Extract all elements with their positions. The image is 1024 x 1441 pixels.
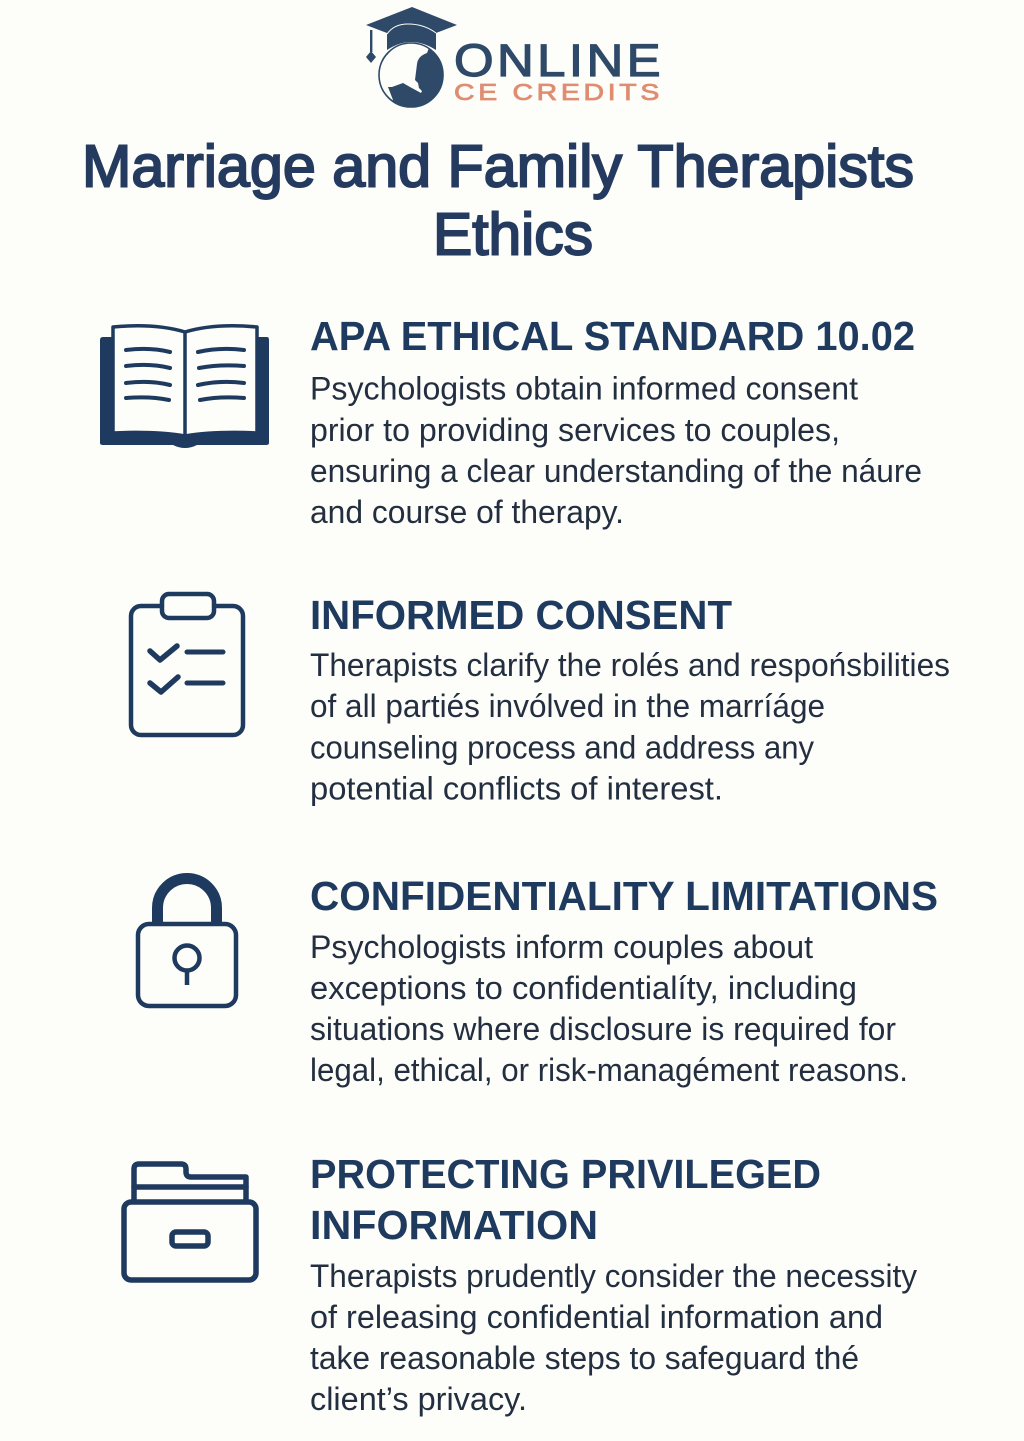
icon: padlock <box>138 878 236 1006</box>
panel: APA ethical standard <box>100 313 922 530</box>
title: Marriage and Family Therapists <box>82 134 914 200</box>
body text <box>310 929 908 1088</box>
body text: ensuring a clear understanding of the náure <box>310 453 922 489</box>
heading <box>310 1151 821 1248</box>
panel: informed consent <box>131 592 950 806</box>
panel: protecting privileged information <box>124 1151 917 1417</box>
body text: prior to providing services to couples, <box>310 412 840 448</box>
heading: INFORMATION <box>310 1202 598 1248</box>
heading: CONFIDENTIALITY LIMITATIONS <box>310 873 938 919</box>
body text <box>310 370 922 530</box>
logo wordmark: ONLINE: ONLINE <box>454 35 664 86</box>
icon: clipboard checklist <box>131 594 243 735</box>
heading: INFORMED CONSENT <box>310 592 732 638</box>
body text <box>310 647 950 806</box>
body text: exceptions to confidentialíty, including <box>310 970 857 1006</box>
icon: file drawer <box>124 1164 256 1280</box>
body text: and course of therapy. <box>310 494 624 530</box>
body text: take reasonable steps to safeguard thé <box>310 1340 859 1376</box>
panel: confidentiality limitations <box>138 873 938 1088</box>
body text: client’s privacy. <box>310 1381 527 1417</box>
body text: of all partiés invólved in the marríáge <box>310 688 825 724</box>
body text: Therapists clarify the rolés and respońsbilities <box>310 647 950 683</box>
icon: graduation cap and profile <box>366 7 457 112</box>
body text: situations where disclosure is required for <box>310 1011 896 1047</box>
body text: Psychologists inform couples about <box>310 929 813 965</box>
title <box>82 134 914 268</box>
logo: Online CE Credits <box>366 7 664 112</box>
icon: open book <box>100 326 269 448</box>
title: Ethics <box>433 202 593 268</box>
body text: potential conflicts of interest. <box>310 770 723 806</box>
body text <box>310 1258 917 1417</box>
heading: APA ETHICAL STANDARD 10.02 <box>310 313 915 359</box>
heading: PROTECTING PRIVILEGED <box>310 1151 821 1197</box>
body text: counseling process and address any <box>310 730 814 766</box>
body text: Psychologists obtain informed consent <box>310 370 858 406</box>
body text: of releasing confidential information and <box>310 1299 883 1335</box>
body text: legal, ethical, or risk-managément reasons. <box>310 1052 908 1088</box>
body text: Therapists prudently consider the necessity <box>310 1258 917 1294</box>
logo tagline: CE CREDITS: CE CREDITS <box>454 79 663 105</box>
